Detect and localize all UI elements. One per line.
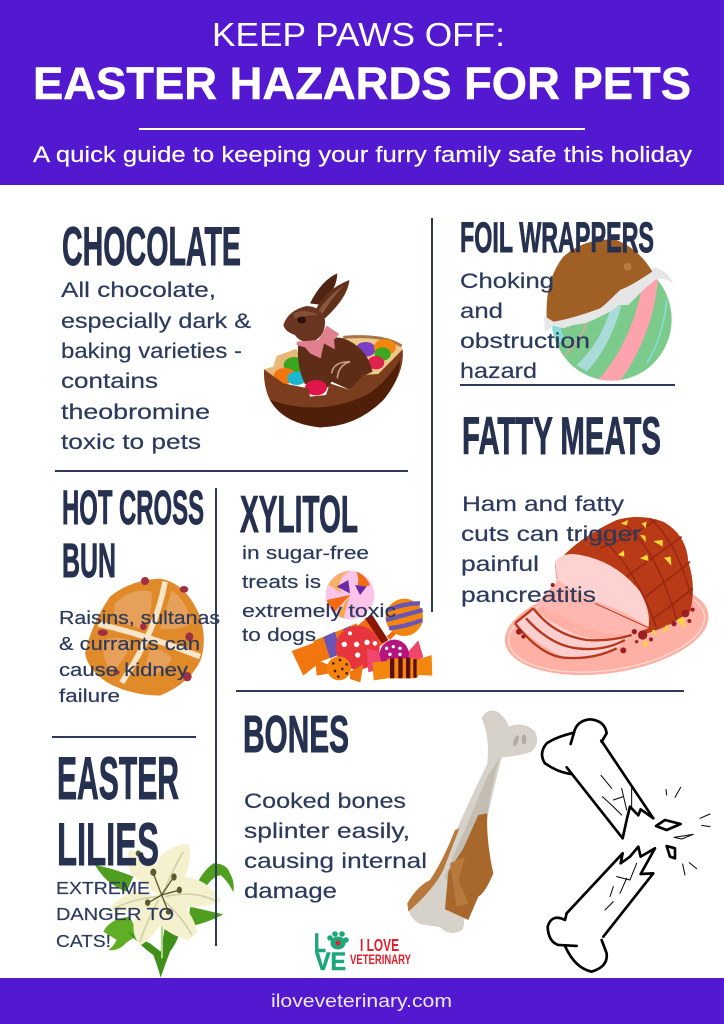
hot cross bun heading: BUN — [62, 535, 116, 588]
fatty meats text: pancreatitis — [461, 584, 596, 607]
logo paw — [327, 931, 349, 950]
upper bone piece — [542, 719, 681, 858]
bones text: Cooked bones — [244, 790, 406, 813]
icon: foil wrapped egg — [544, 240, 673, 383]
xylitol text — [242, 542, 396, 645]
icon: meaty drumstick bone — [407, 710, 537, 933]
fatty meats text: Ham and fatty — [462, 493, 625, 516]
easter lilies heading: LILIES — [57, 811, 159, 878]
foil wrappers text — [460, 270, 590, 383]
section: fatty meats — [461, 407, 661, 607]
hot cross bun text: failure — [59, 686, 120, 706]
icon: chocolate bunny in egg — [264, 273, 403, 427]
hot cross bun text — [59, 608, 220, 706]
easter lilies heading — [57, 745, 179, 878]
xylitol text: extremely toxic — [242, 600, 396, 621]
xylitol heading: XYLITOL — [240, 486, 358, 544]
logo: I Love Veterinary — [314, 928, 411, 976]
bones heading: BONES — [243, 706, 349, 764]
bones text: causing internal — [244, 850, 427, 873]
section: foil wrappers — [460, 214, 654, 383]
hot cross bun heading — [62, 482, 204, 588]
icon: hot cross bun — [85, 577, 204, 696]
icon: white lily with leaves — [95, 844, 234, 978]
subtitle: A quick guide to keeping your furry family safe this holiday — [33, 142, 692, 167]
icon: broken bone line drawing — [542, 719, 710, 972]
logo letters — [314, 928, 346, 976]
fatty meats text — [461, 493, 641, 607]
logo wordmark: VETERINARY — [350, 951, 411, 967]
xylitol text: treats is — [242, 571, 321, 592]
foil wrappers text: obstruction — [460, 330, 590, 353]
lower bone piece — [548, 847, 655, 972]
logo wordmark: I LOVE — [360, 935, 399, 955]
chocolate text: All chocolate, — [61, 279, 216, 302]
chocolate text: contains — [61, 370, 158, 393]
easter lilies heading: EASTER — [57, 745, 179, 812]
footer url: iloveveterinary.com — [271, 991, 452, 1011]
foil wrappers text: hazard — [460, 360, 537, 383]
icon: pile of candy — [292, 571, 432, 682]
header banner — [0, 0, 724, 185]
fatty meats text: painful — [461, 553, 539, 576]
section: hot cross bun: HOT CROSS — [62, 482, 204, 535]
chocolate text — [61, 279, 251, 454]
bones text: splinter easily, — [244, 820, 410, 843]
section: hot cross bun — [59, 482, 220, 706]
xylitol text: to dogs — [242, 624, 316, 645]
easter lilies text: EXTREME — [56, 878, 150, 898]
title line one: KEEP PAWS OFF: — [212, 16, 505, 53]
section: bones — [243, 706, 427, 903]
logo letters: VE — [315, 948, 346, 976]
section: easter lilies — [56, 745, 179, 951]
hot cross bun text: & currants can — [59, 634, 200, 654]
chocolate heading: CHOCOLATE — [62, 215, 241, 277]
easter lilies text — [56, 878, 174, 951]
logo letters: L — [314, 928, 326, 958]
logo wordmark — [350, 935, 411, 967]
easter lilies text: DANGER TO — [56, 904, 174, 924]
icon: glazed ham on plate — [499, 517, 715, 687]
chocolate text: theobromine — [61, 401, 210, 424]
bones text: damage — [244, 880, 337, 903]
bones text — [244, 790, 427, 903]
title line two: EASTER HAZARDS FOR PETS — [33, 58, 691, 109]
chocolate text: toxic to pets — [61, 431, 201, 454]
xylitol text: in sugar-free — [242, 542, 369, 563]
hot cross bun text: cause kidney — [59, 660, 188, 680]
easter lilies text: CATS! — [56, 931, 111, 951]
section: xylitol — [240, 486, 396, 645]
chocolate text: baking varieties - — [61, 340, 242, 363]
hot cross bun text: Raisins, sultanas — [59, 608, 220, 628]
chocolate text: especially dark & — [61, 310, 251, 333]
fatty meats text: cuts can trigger — [461, 523, 641, 546]
section: chocolate — [61, 215, 251, 454]
footer bar — [0, 978, 724, 1024]
foil wrappers text: Choking — [460, 270, 554, 293]
foil wrappers text: and — [460, 300, 503, 323]
